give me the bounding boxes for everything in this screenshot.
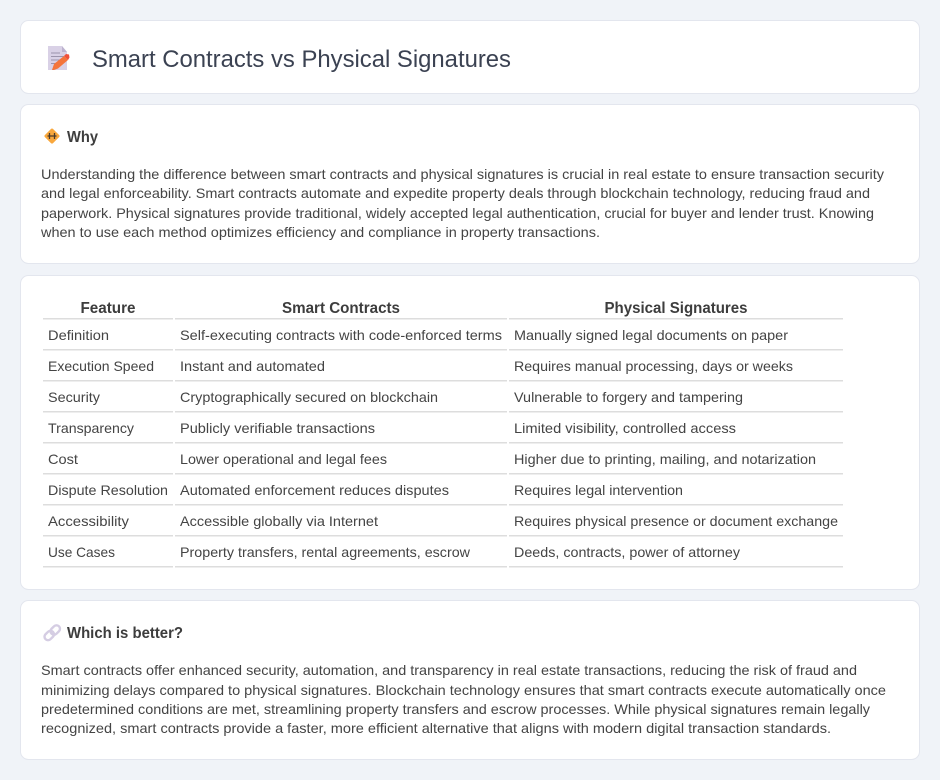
panel: header (20, 20, 920, 94)
row: security: Vulnerable to forgery and tampering (514, 389, 743, 405)
panel: why (20, 104, 920, 264)
row: transparency: Transparency (48, 420, 134, 436)
row: dispute resolution (48, 482, 683, 498)
table header: Physical Signatures (604, 300, 748, 317)
heading: why: Why (67, 129, 98, 146)
row: cost: Higher due to printing, mailing, and notarization (514, 451, 816, 467)
row: use cases: Use Cases (48, 544, 115, 560)
panel: comparison table (20, 276, 920, 590)
row: accessibility: Requires physical presence or document exchange (514, 513, 838, 529)
text block: why: when to use each method optimizes efficiency and compliance in property transactions. (40, 224, 600, 240)
row: security: Cryptographically secured on blockchain (180, 389, 438, 405)
row: use cases: Deeds, contracts, power of attorney (514, 544, 740, 560)
table header (80, 300, 748, 317)
row: security: Security (48, 389, 100, 405)
text block: why: paperwork. Physical signatures provide traditional, widely accepted legal authentication, crucial for buyer and lender trust. Knowing (41, 205, 874, 221)
row: execution speed: Requires manual processing, days or weeks (514, 358, 793, 374)
text block: which is better: recognized, smart contracts provide a faster, more efficient alternative that aligns with modern digital transaction standards. (41, 720, 831, 736)
row: cost (48, 451, 816, 467)
row: use cases (48, 544, 740, 560)
row: transparency: Limited visibility, controlled access (514, 420, 736, 436)
icon: document with pencil (48, 46, 70, 70)
row: definition: Manually signed legal documents on paper (514, 327, 788, 343)
row: accessibility: Accessible globally via Internet (180, 513, 378, 529)
text block: which is better: minimizing delays compared to physical signatures. Blockchain technology ensures that smart contracts execute automatically once (41, 682, 886, 698)
row: use cases: Property transfers, rental agreements, escrow (180, 544, 471, 560)
row: execution speed (48, 358, 793, 374)
heading: which is better: Which is better? (67, 625, 183, 642)
title: Smart Contracts vs Physical Signatures (92, 46, 511, 73)
row: cost: Cost (48, 451, 78, 467)
row: execution speed: Instant and automated (180, 358, 325, 374)
icon: warning diamond (44, 128, 60, 144)
panel: which is better (20, 600, 920, 760)
row: definition: Self-executing contracts with code-enforced terms (180, 327, 502, 343)
row: dispute resolution: Dispute Resolution (48, 482, 168, 498)
row: security (48, 389, 743, 405)
table header: Smart Contracts (282, 300, 400, 317)
row: dispute resolution: Requires legal intervention (514, 482, 683, 498)
row: accessibility (48, 513, 838, 529)
row: accessibility: Accessibility (48, 513, 129, 529)
row: cost: Lower operational and legal fees (180, 451, 387, 467)
icon: chain link (43, 624, 61, 642)
table header: Feature (80, 300, 136, 317)
row: definition (48, 327, 788, 343)
text block: which is better (41, 662, 886, 736)
row: dispute resolution: Automated enforcement reduces disputes (180, 482, 449, 498)
text block: why: Understanding the difference between smart contracts and physical signatures is crucial in real estate to ensure transaction security (41, 166, 884, 182)
text block: why (40, 166, 884, 240)
row: definition: Definition (48, 327, 109, 343)
text block: why: and legal enforceability. Smart contracts automate and expedite property deals through blockchain technology, reducing fraud and (41, 185, 870, 201)
row: transparency: Publicly verifiable transactions (180, 420, 375, 436)
row: execution speed: Execution Speed (48, 358, 154, 374)
row: transparency (48, 420, 736, 436)
text block: which is better: Smart contracts offer enhanced security, automation, and transparency in real estate transactions, reducing the risk of fraud and (41, 662, 857, 678)
text block: which is better: predetermined conditions are met, streamlining property transfers and escrow processes. While physical signatures remain legally (41, 701, 870, 717)
